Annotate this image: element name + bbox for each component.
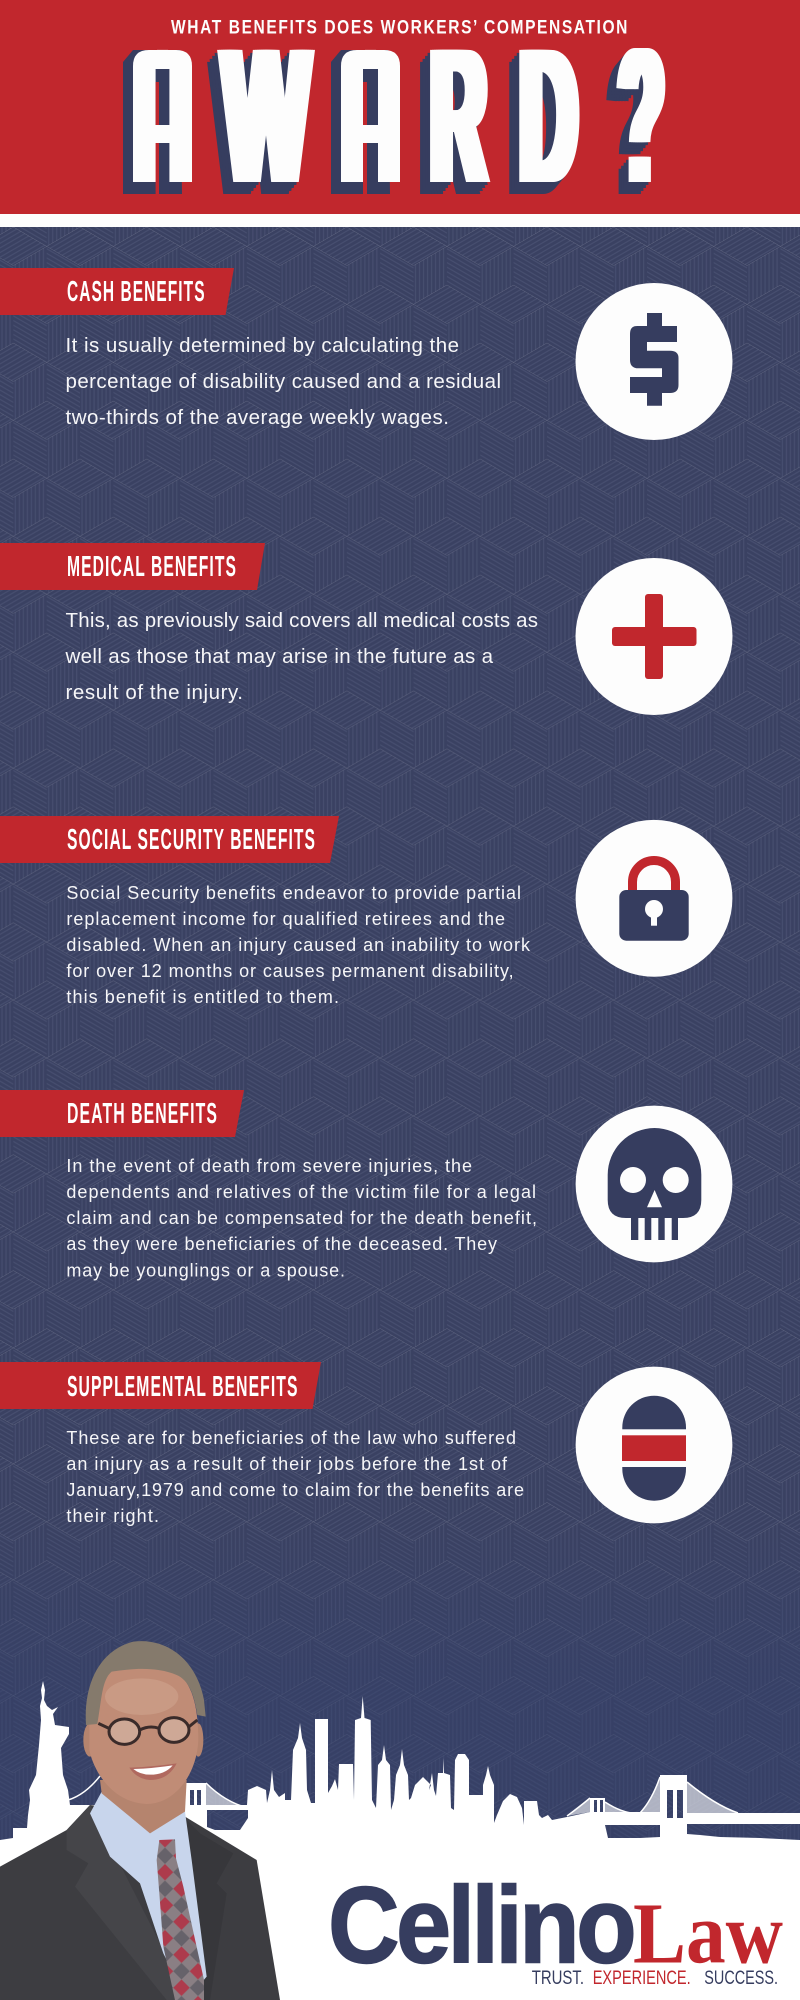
logo: Cellino: Cellino xyxy=(328,1864,633,1986)
hair xyxy=(86,1641,206,1725)
bridge cables left xyxy=(68,1776,248,1808)
text: death benefits description: as they were beneficiaries of the deceased. They xyxy=(66,1234,497,1254)
tagline: TRUST. xyxy=(532,1968,584,1989)
title: AWARD?: A xyxy=(139,8,186,222)
text: medical benefits description: well as those that may arise in the future as a xyxy=(64,645,494,668)
bridge cables right xyxy=(567,1777,738,1816)
text: supplemental benefits description: These are for beneficiaries of the law who suffered xyxy=(66,1428,516,1448)
text: death benefits description: may be younglings or a spouse. xyxy=(66,1260,345,1280)
title: AWARD?: W xyxy=(223,8,309,222)
text: social security description: this benefit is entitled to them. xyxy=(66,987,339,1007)
tagline: EXPERIENCE. xyxy=(593,1968,691,1989)
panel: death benefits xyxy=(0,1090,537,1280)
heading: supplemental benefits: SUPPLEMENTAL BENEFITS xyxy=(67,1371,298,1403)
text: medical benefits description: This, as previously said covers all medical costs as xyxy=(66,609,538,632)
portrait of attorney xyxy=(0,1641,280,2000)
lower background tint xyxy=(0,1520,800,1860)
shirt xyxy=(90,1792,207,2000)
title: AWARD?: ? xyxy=(619,8,664,222)
face xyxy=(89,1666,198,1804)
ribbon: supplemental benefits xyxy=(0,1362,321,1409)
text: social security description: disabled. When an injury caused an inability to work xyxy=(66,935,531,955)
text: social security description xyxy=(66,883,531,1007)
text: supplemental benefits description: an injury as a result of their jobs before the 1st of xyxy=(66,1454,508,1474)
logo xyxy=(328,1864,783,1989)
icon: capsule xyxy=(576,1367,732,1523)
heading: social security benefits: SOCIAL SECURITY BENEFITS xyxy=(67,824,316,856)
tagline xyxy=(532,1968,778,1989)
text: death benefits description: dependents and relatives of the victim file for a legal xyxy=(66,1182,536,1202)
icon: skull xyxy=(576,1106,732,1262)
tagline: SUCCESS. xyxy=(704,1968,778,1989)
panel: cash benefits xyxy=(0,268,501,429)
text: social security description: replacement income for qualified retirees and the xyxy=(66,909,505,929)
text: cash benefits description: percentage of disability caused and a residual xyxy=(66,370,501,393)
ribbon: social security benefits xyxy=(0,816,339,863)
title: AWARD?: R xyxy=(431,8,486,222)
mouth xyxy=(129,1763,177,1780)
text: medical benefits description: result of the injury. xyxy=(66,681,243,704)
title letter detail: counters of both A letters xyxy=(156,69,378,194)
skyline silhouette xyxy=(0,1681,800,2000)
heading: cash benefits: CASH BENEFITS xyxy=(67,276,206,308)
text: cash benefits description xyxy=(66,334,501,429)
ribbon: medical benefits xyxy=(0,543,265,590)
title letter backing: first A xyxy=(123,50,192,194)
bridge suspender hatching xyxy=(206,1777,738,1816)
icon: dollar sign xyxy=(576,283,732,440)
text: death benefits description: claim and can be compensated for the death benefit, xyxy=(66,1208,537,1228)
suit xyxy=(0,1805,280,2000)
ribbon: death benefits xyxy=(0,1090,244,1137)
ears xyxy=(83,1723,97,1757)
text: social security description: for over 12 months or causes permanent disability, xyxy=(66,961,514,981)
text: medical benefits description xyxy=(64,609,538,704)
heading: medical benefits: MEDICAL BENEFITS xyxy=(67,551,237,583)
glasses xyxy=(98,1718,197,1744)
text: supplemental benefits description: their right. xyxy=(66,1506,159,1526)
header white stripe xyxy=(0,214,800,227)
text: cash benefits description: two-thirds of the average weekly wages. xyxy=(66,406,449,429)
text: supplemental benefits description: January,1979 and come to claim for the benefits are xyxy=(66,1480,524,1500)
panel: social security benefits xyxy=(0,816,531,1007)
text: supplemental benefits description xyxy=(66,1428,524,1526)
text: death benefits description xyxy=(66,1156,537,1280)
text: death benefits description: In the event of death from severe injuries, the xyxy=(66,1156,472,1176)
title: AWARD?: D xyxy=(520,8,576,222)
title: AWARD?: A xyxy=(347,8,394,222)
logo: Law: Law xyxy=(633,1884,783,1982)
text: social security description: Social Security benefits endeavor to provide partial xyxy=(66,883,521,903)
text: cash benefits description: It is usually determined by calculating the xyxy=(66,334,459,357)
header red banner xyxy=(0,0,800,214)
panel: supplemental benefits xyxy=(0,1362,524,1526)
icon: medical cross xyxy=(576,558,732,715)
ribbon: cash benefits xyxy=(0,268,234,315)
neck xyxy=(100,1780,187,1833)
heading: death benefits: DEATH BENEFITS xyxy=(67,1098,218,1130)
title letter backing: second A xyxy=(331,50,400,194)
panel: medical benefits xyxy=(0,543,538,704)
title: AWARD? xyxy=(139,8,666,222)
header subtitle: WHAT BENEFITS DOES WORKERS’ COMPENSATION xyxy=(171,16,629,38)
tie xyxy=(157,1839,204,2000)
icon: padlock xyxy=(576,820,732,977)
